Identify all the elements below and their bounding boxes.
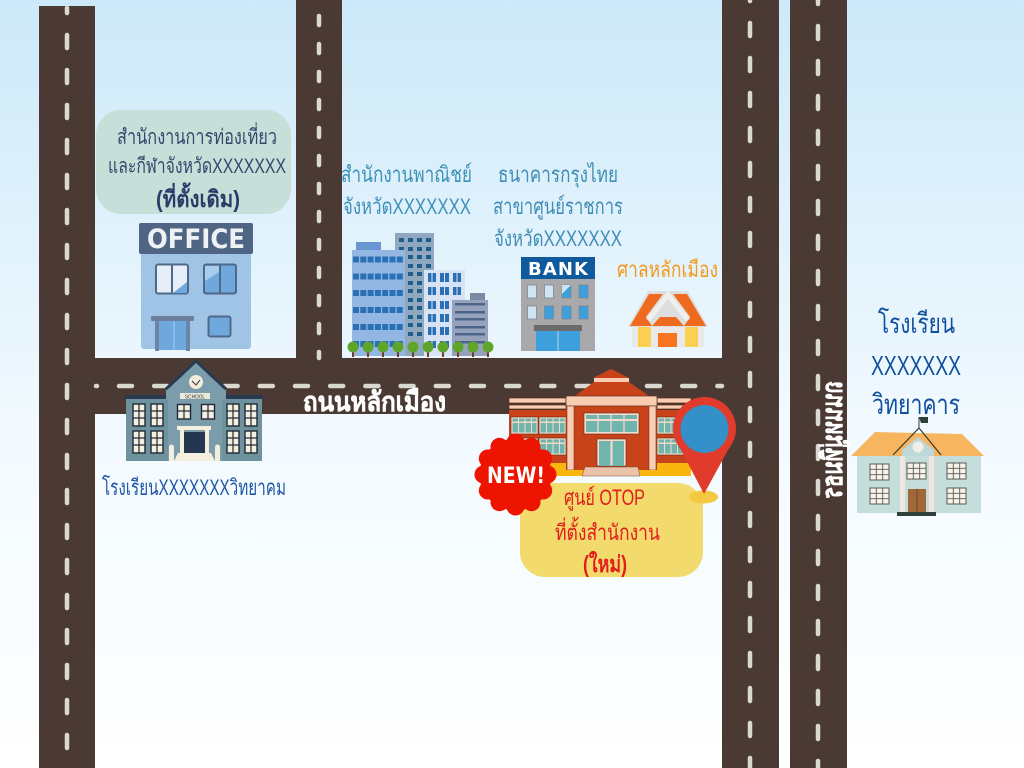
badge: NEW! — [474, 434, 556, 516]
icon: OTOP centre building — [509, 369, 691, 476]
label: city pillar shrine: ศาลหลักเมือง — [617, 257, 718, 282]
callout: original tourism office: และกีฬาจังหวัดXXXXXXX — [108, 155, 286, 178]
road label: ถนนหลักเมือง: ถนนหลักเมือง — [303, 387, 446, 417]
callout: new OTOP office location: ศูนย์ OTOP — [564, 485, 645, 511]
icon: office building — [139, 223, 253, 351]
label: Krungthai bank — [493, 162, 623, 251]
icon: bank building — [521, 257, 595, 351]
callout: original tourism office: สำนักงานการท่องเที่ยว — [117, 122, 277, 149]
road label: vertical road name: ถนนหมู่ทิมธร — [817, 381, 850, 498]
callout: new OTOP office location — [520, 483, 703, 577]
callout: new OTOP office location: ที่ตั้งสำนักงาน — [555, 517, 660, 545]
label: commerce office: จังหวัดXXXXXXX — [343, 194, 471, 219]
icon: school with orange roof — [851, 417, 984, 516]
label: school on the right — [871, 307, 961, 420]
callout: new OTOP office location: (ใหม่) — [583, 550, 627, 577]
icon: office building: OFFICE — [147, 224, 245, 255]
icon: bank building: BANK — [528, 259, 589, 280]
icon: shrine — [628, 291, 708, 347]
label: commerce office — [341, 162, 472, 219]
icon: city towers with trees — [348, 233, 494, 357]
icon: school building — [125, 361, 263, 461]
label: commerce office: สำนักงานพาณิชย์ — [341, 162, 472, 187]
badge: NEW!: NEW! — [487, 464, 545, 489]
label: school on the right: โรงเรียน — [878, 307, 955, 339]
road network — [39, 0, 847, 768]
icon: school building: SCHOOL — [185, 394, 205, 400]
label: school on the right: XXXXXXX — [871, 350, 961, 381]
label: Krungthai bank: สาขาศูนย์ราชการ — [493, 194, 623, 220]
callout: original tourism office — [96, 110, 291, 214]
label: Krungthai bank: จังหวัดXXXXXXX — [494, 226, 622, 251]
label: school name: โรงเรียนXXXXXXXวิทยาคม — [102, 475, 286, 500]
callout: original tourism office: (ที่ตั้งเดิม) — [156, 182, 240, 212]
label: school on the right: วิทยาคาร — [872, 389, 960, 420]
icon: location pin — [673, 397, 736, 504]
label: Krungthai bank: ธนาคารกรุงไทย — [498, 162, 618, 188]
